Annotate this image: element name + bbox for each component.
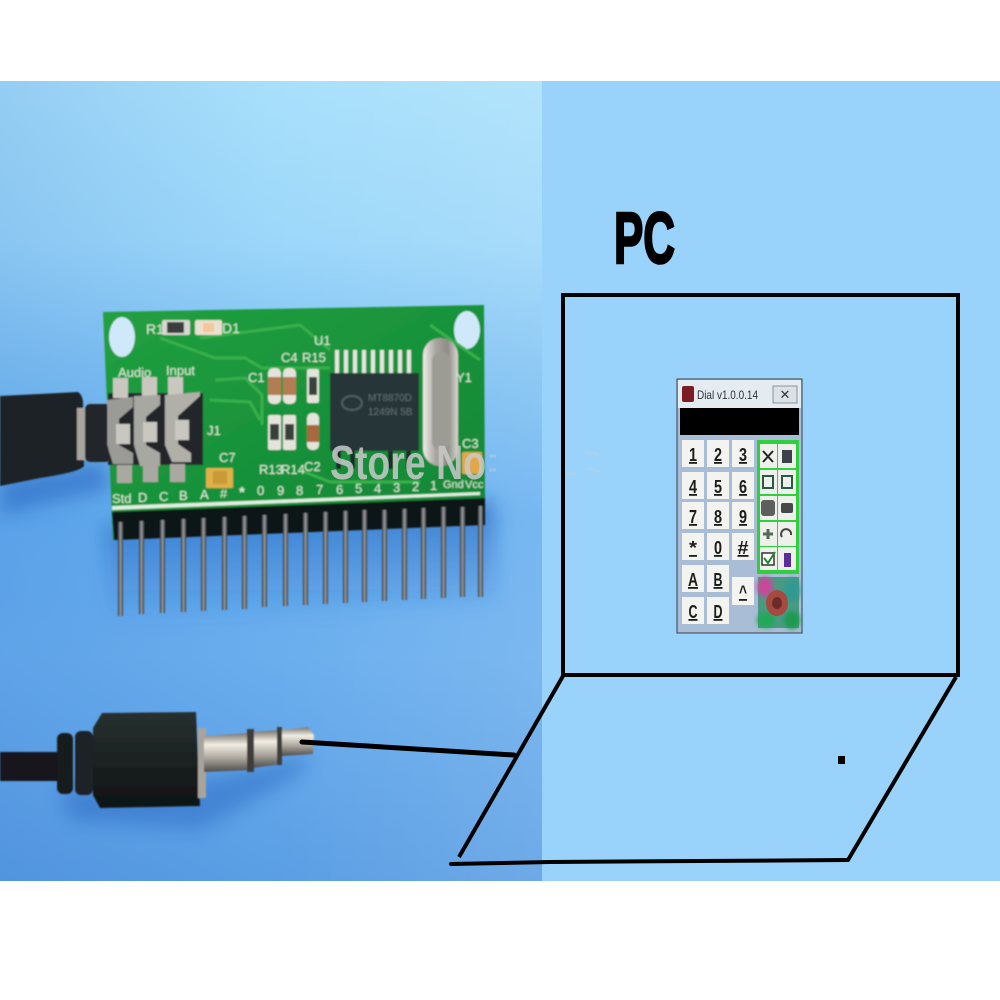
- silkscreen labels: 7: [316, 482, 323, 497]
- lower audio plug: [0, 712, 314, 808]
- silkscreen labels: J1: [207, 423, 221, 438]
- silkscreen labels: B: [179, 488, 188, 503]
- traces: [160, 325, 480, 482]
- mounting holes: [109, 317, 135, 357]
- headphone jack J1: [107, 377, 203, 483]
- silkscreen labels: 4: [374, 481, 381, 496]
- keypad: 4: [689, 477, 697, 497]
- header pins: [118, 506, 483, 616]
- panel: PC background: [542, 81, 1000, 881]
- silkscreen labels: U1: [314, 333, 331, 348]
- silkscreen labels: C7: [219, 450, 236, 465]
- laptop keyboard: [459, 676, 956, 860]
- header plastic strip: [112, 498, 485, 540]
- keypad: 1: [689, 445, 697, 465]
- resistor R1 and LED D1: [162, 320, 222, 335]
- keypad: 3: [739, 445, 747, 465]
- silkscreen labels: [112, 320, 484, 506]
- pin fronts: [118, 506, 483, 542]
- silkscreen labels: 8: [296, 483, 303, 498]
- keypad: D: [714, 602, 722, 622]
- keypad: 7: [689, 507, 697, 527]
- silkscreen labels: R14: [281, 462, 305, 477]
- keypad: B: [714, 570, 722, 590]
- silkscreen labels: R13: [259, 462, 283, 477]
- title bar: Dial v1.0.0.14: [697, 388, 758, 402]
- silkscreen labels: Vcc: [465, 479, 484, 491]
- silkscreen line: [112, 492, 480, 510]
- laptop trackpoint dot: [838, 756, 845, 764]
- silkscreen labels: 3: [393, 480, 400, 495]
- silkscreen labels: 9: [277, 483, 284, 498]
- silkscreen labels: Std: [112, 491, 132, 506]
- upper audio plug: [0, 392, 111, 486]
- upper plug shadow: [0, 460, 110, 515]
- connection line: [302, 742, 514, 755]
- capacitors and resistors: [268, 368, 319, 450]
- display: [680, 408, 799, 435]
- silkscreen labels: D: [138, 490, 147, 505]
- keypad: 8: [714, 507, 722, 527]
- silkscreen labels: C2: [304, 459, 321, 474]
- silkscreen labels: C3: [462, 436, 479, 451]
- keypad: 5: [714, 477, 722, 497]
- green tool panel: [757, 440, 799, 574]
- keypad: [682, 440, 754, 624]
- keypad: #: [738, 538, 748, 558]
- silkscreen labels: Audio: [118, 365, 151, 380]
- board: [103, 305, 485, 540]
- IC chip: [330, 350, 419, 469]
- silkscreen labels: C: [159, 489, 168, 504]
- silkscreen labels: A: [200, 487, 209, 502]
- watermark: store name: Store No: [330, 437, 486, 490]
- panel: photo background: [0, 81, 542, 881]
- keypad: 6: [739, 477, 747, 497]
- laptop outline: [451, 295, 958, 864]
- crystal: [423, 338, 458, 466]
- silkscreen labels: *: [239, 484, 245, 501]
- lower plug shadow: [60, 755, 310, 830]
- keypad: C: [688, 602, 698, 622]
- circuit board module: [103, 305, 485, 616]
- silkscreen labels: 2: [412, 479, 419, 494]
- keypad: 9: [739, 507, 747, 527]
- silkscreen labels: Gnd: [443, 479, 464, 491]
- IC chip: MT8870D: [368, 393, 412, 404]
- silkscreen labels: C1: [248, 370, 265, 385]
- keypad: A: [688, 570, 698, 590]
- silkscreen labels: R1: [146, 321, 164, 337]
- capacitor C3: [462, 452, 482, 474]
- silkscreen labels: Input: [166, 363, 195, 378]
- keypad: 2: [714, 445, 722, 465]
- tantalum capacitor C7: [206, 468, 233, 488]
- silkscreen labels: C4: [281, 350, 298, 365]
- silkscreen labels: 6: [336, 482, 343, 497]
- heading: PC: PC: [614, 199, 675, 279]
- laptop screen: [563, 295, 958, 675]
- title bar: [678, 380, 801, 408]
- silkscreen labels: 1: [430, 478, 437, 493]
- silkscreen labels: #: [220, 486, 228, 501]
- silkscreen labels: R15: [302, 350, 326, 365]
- silkscreen labels: D1: [222, 320, 240, 336]
- flower picture: [757, 577, 800, 629]
- title bar: ✕: [780, 387, 790, 402]
- silkscreen labels: 0: [257, 483, 264, 498]
- keypad: *: [689, 538, 697, 558]
- silkscreen labels: Y1: [456, 370, 472, 385]
- keypad: 0: [714, 538, 722, 558]
- silkscreen labels: 5: [355, 481, 362, 496]
- keypad: ^: [739, 582, 747, 602]
- dialer application window: [677, 379, 802, 633]
- IC chip: 1249N 5B: [368, 407, 413, 418]
- circuit board shadow: [105, 500, 495, 625]
